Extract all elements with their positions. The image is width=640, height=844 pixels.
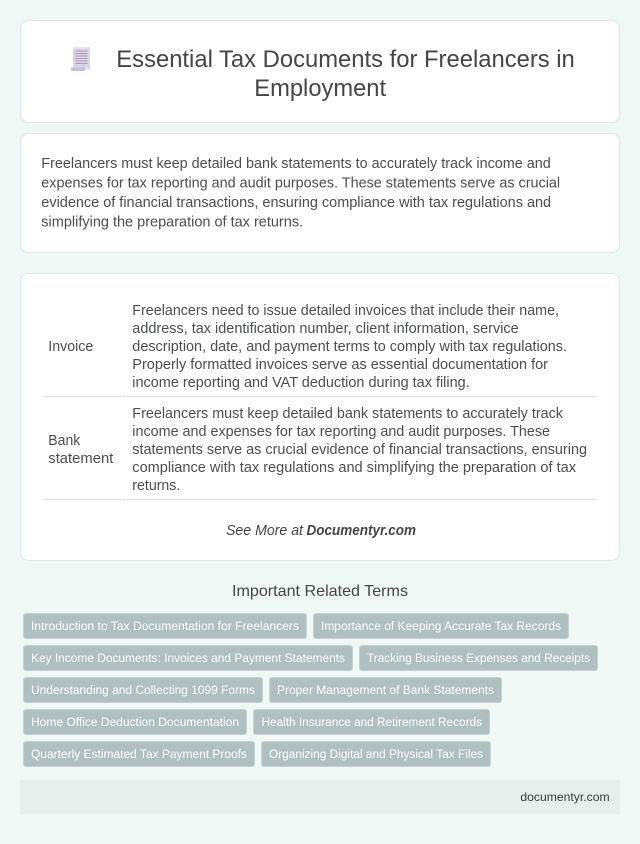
row: invoice (48, 303, 567, 391)
invoice description (132, 303, 567, 391)
tag: Key Income Documents: Invoices and Payment Statements (31, 651, 345, 665)
panel: document table (20, 274, 620, 560)
tag: Organizing Digital and Physical Tax Files (269, 747, 483, 761)
panel: introduction (20, 134, 620, 252)
tag (360, 646, 598, 670)
see more link: Documentyr.com (306, 523, 416, 539)
bank statement description: statements serve as crucial evidence of financial transactions, ensuring (132, 442, 587, 458)
bank statement description: compliance with tax regulations and simplifying the preparation of tax (132, 460, 577, 476)
tag (24, 710, 246, 734)
bank statement description: returns. (132, 478, 180, 494)
tag (24, 646, 352, 670)
tag: Tracking Business Expenses and Receipts (367, 651, 590, 665)
see more link: See More at (226, 523, 304, 539)
label: invoice: Invoice (48, 339, 93, 355)
tag: Home Office Deduction Documentation (31, 715, 239, 729)
title (116, 46, 575, 102)
tag (314, 614, 568, 638)
title: Employment (254, 75, 386, 102)
tag: Importance of Keeping Accurate Tax Records (321, 619, 561, 633)
invoice description: Freelancers need to issue detailed invoices that include their name, (132, 303, 559, 319)
tag: Understanding and Collecting 1099 Forms (31, 683, 255, 697)
intro text: Freelancers must keep detailed bank statements to accurately track income and (41, 156, 551, 172)
tag: Introduction to Tax Documentation for Freelancers (31, 619, 299, 633)
related terms tags (24, 614, 598, 766)
footer site name: documentyr.com (520, 790, 610, 804)
tag (24, 614, 306, 638)
bank statement description (132, 406, 587, 494)
icon: document scroll (71, 47, 90, 71)
tag: Quarterly Estimated Tax Payment Proofs (31, 747, 247, 761)
tag (24, 678, 262, 702)
tag (254, 710, 490, 734)
label: bank statement (48, 433, 113, 467)
invoice description: address, tax identification number, client information, service (132, 321, 519, 337)
tag (262, 742, 490, 766)
intro text: evidence of financial transactions, ensuring compliance with tax regulations and (41, 195, 551, 211)
label: bank statement: Bank (48, 433, 81, 449)
invoice description: income reporting and VAT deduction during tax filing. (132, 375, 470, 391)
intro text: simplifying the preparation of tax returns. (41, 214, 303, 230)
label: bank statement: statement (48, 451, 113, 467)
invoice description: description, date, and payment terms to comply with tax regulations. (132, 339, 567, 355)
bank statement description: Freelancers must keep detailed bank statements to accurately track (132, 406, 564, 422)
tag (270, 678, 502, 702)
panel: title header (20, 20, 620, 122)
row: bank statement (48, 406, 587, 494)
footer (20, 780, 620, 814)
intro text (41, 156, 560, 230)
invoice description: Properly formatted invoices serve as essential documentation for (132, 357, 548, 373)
tag (24, 742, 254, 766)
heading: important related terms: Important Related Terms (232, 583, 408, 600)
title: Essential Tax Documents for Freelancers in (116, 46, 575, 73)
tag: Proper Management of Bank Statements (277, 683, 494, 697)
bank statement description: income and expenses for tax reporting and audit purposes. These (132, 424, 550, 440)
tag: Health Insurance and Retirement Records (262, 715, 482, 729)
see more link (226, 523, 416, 539)
intro text: expenses for tax reporting and audit purposes. These statements serve as crucial (41, 176, 560, 192)
